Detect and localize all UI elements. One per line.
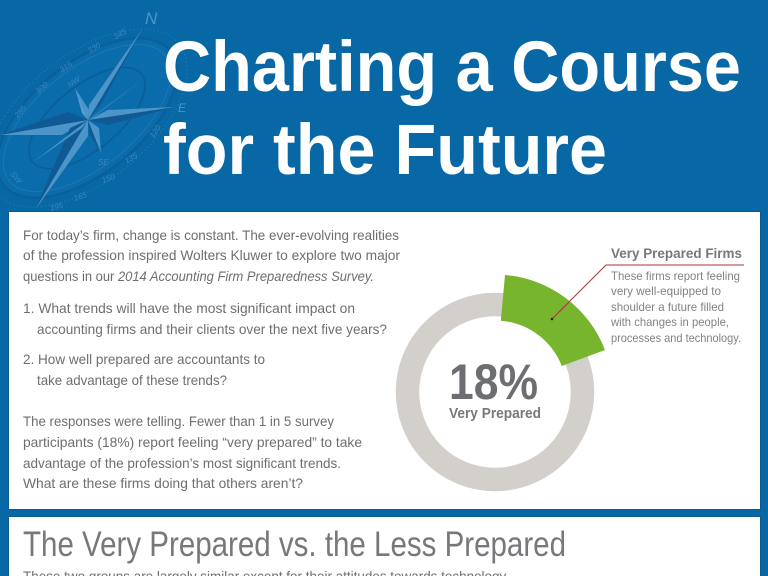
callout description: processes and technology. <box>611 331 741 345</box>
panel: comparison <box>8 516 760 576</box>
icon: compass rose: 300 <box>34 80 50 96</box>
text block: question 1: 1. What trends will have the most significant impact on <box>23 300 355 316</box>
icon: compass rose: E <box>178 101 187 115</box>
donut label: Very Prepared <box>449 406 541 422</box>
text block: survey responses <box>23 413 362 491</box>
icon: compass rose <box>0 0 218 241</box>
panel: introduction <box>8 212 760 510</box>
callout heading: very prepared firms: Very Prepared Firms <box>611 246 742 261</box>
chart: 18% very prepared donut <box>408 275 605 480</box>
callout description: with changes in people, <box>610 315 729 329</box>
title: Charting a Course <box>163 28 741 107</box>
text block: introduction paragraph: of the profession inspired Wolters Kluwer to explore two major <box>23 247 400 263</box>
text block: survey responses: The responses were telling. Fewer than 1 in 5 survey <box>23 413 334 429</box>
callout leader line <box>551 265 744 320</box>
title: for the Future <box>163 111 607 190</box>
text block: survey responses: participants (18%) report feeling “very prepared” to take <box>23 434 362 450</box>
text block: introduction paragraph: For today’s firm, change is constant. The ever-evolving realities <box>23 227 399 243</box>
icon: compass rose: N <box>145 9 158 28</box>
text block: survey responses: What are these firms doing that others aren’t? <box>23 475 303 491</box>
text block: question 1 <box>23 300 387 337</box>
text block: question 2: take advantage of these trends? <box>37 372 227 388</box>
icon: compass rose: 120 <box>148 123 163 140</box>
icon: compass rose: SE <box>98 158 109 167</box>
icon: compass rose: 135 <box>123 151 140 165</box>
icon: compass rose: SW <box>8 170 24 186</box>
icon: compass rose: 345 <box>112 27 129 41</box>
text block: question 2 <box>23 351 265 388</box>
text block: introduction paragraph <box>23 227 400 284</box>
icon: compass rose: 315 <box>58 59 74 75</box>
icon: compass rose: 285 <box>12 103 28 120</box>
comparison heading: The Very Prepared vs. the Less Prepared <box>23 525 566 564</box>
icon: compass rose: 330 <box>86 41 103 55</box>
text block: question 1: accounting firms and their clients over the next five years? <box>37 321 387 337</box>
text block: survey responses: advantage of the profession’s most significant trends. <box>23 455 341 471</box>
icon: compass rose: 165 <box>73 190 89 203</box>
text block: question 2: 2. How well prepared are accountants to <box>23 351 265 367</box>
icon: compass rose: 195 <box>49 201 65 213</box>
callout description: very well-equipped to <box>611 284 721 298</box>
callout description: shoulder a future filled <box>611 300 724 314</box>
text block: introduction paragraph: questions in our 2014 Accounting Firm Preparedness Survey. <box>23 268 374 284</box>
callout description: These firms report feeling <box>611 269 740 283</box>
title <box>163 28 741 190</box>
donut value: 18% <box>449 354 538 410</box>
callout description <box>610 269 741 345</box>
icon: compass rose: 150 <box>101 172 117 185</box>
icon: compass rose: NW <box>66 74 83 90</box>
